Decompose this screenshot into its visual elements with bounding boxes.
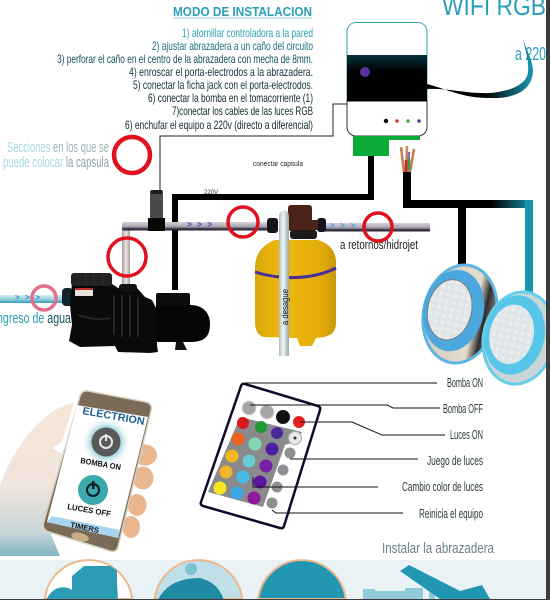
- installation steps: 6) conectar la bomba en el tomacorriente (1): [148, 91, 313, 105]
- flow arrows: [15, 220, 355, 302]
- app labels: TIMERS: [70, 520, 100, 535]
- step circle 2: [155, 560, 242, 600]
- home key: [70, 531, 90, 543]
- red circles: [32, 137, 392, 310]
- installation steps: 5) conectar la ficha jack con el porta-electrodos.: [133, 78, 313, 92]
- hand: [0, 403, 74, 556]
- power cable to pump: [175, 156, 371, 290]
- capsule holder: [148, 190, 165, 231]
- capsule wire: [160, 104, 347, 192]
- color keys: [214, 417, 283, 504]
- sand filter tank: [255, 240, 336, 346]
- tube illustration: [363, 565, 490, 599]
- pump: [62, 273, 210, 353]
- green connector: [353, 136, 420, 156]
- remote labels: [402, 376, 483, 521]
- remote labels: Cambio color de luces: [402, 480, 483, 494]
- exposed wires: [401, 146, 414, 172]
- side keys: [266, 432, 302, 508]
- fingers: [122, 444, 157, 538]
- lights cable: [407, 172, 533, 302]
- remote callout lines: [245, 383, 445, 513]
- cable to 220: [427, 38, 533, 98]
- pipe: main line: [122, 222, 270, 230]
- drain pipe: [279, 210, 290, 356]
- flow arrows: > > >: [15, 293, 40, 302]
- phone body: [43, 391, 151, 552]
- drain pipe: a desague: [280, 289, 290, 325]
- sections label: puede colocar la capsula: [3, 154, 109, 171]
- installation steps: 3) perforar el caño en el centro de la abrazadera con mecha de 8mm.: [57, 52, 313, 66]
- app labels: BOMBA ON: [80, 456, 122, 472]
- app labels: [67, 405, 146, 535]
- remote labels: Bomba ON: [447, 376, 483, 390]
- installation steps: 1) atornillar controladora a la pared: [182, 26, 313, 40]
- remote labels: Luces ON: [450, 428, 483, 442]
- controller: [347, 22, 427, 136]
- hand and phone: [0, 391, 157, 556]
- flow arrows: > > >: [330, 221, 355, 230]
- installation steps: 6) enchufar el equipo a 220v (directo a diferencial): [125, 118, 313, 132]
- remote control: [201, 384, 320, 528]
- app labels: ELECTRION: [81, 405, 146, 428]
- sections label: [3, 139, 109, 171]
- pipe: return line: [325, 223, 430, 232]
- multiport valve: [267, 205, 326, 239]
- installation steps: 4) enroscar el porta-electrodos a la abrazadera.: [129, 65, 313, 79]
- label: instalar la abrazadera: Instalar la abrazadera: [382, 540, 495, 557]
- bottom band: [0, 560, 546, 600]
- power button bomba: [92, 428, 120, 456]
- remote labels: Juego de luces: [427, 454, 483, 468]
- title: MODO DE INSTALACION: [173, 5, 312, 19]
- pipe: intake: [0, 295, 62, 303]
- color keypad: [208, 417, 302, 507]
- label: conectar capsula: conectar capsula: [253, 161, 303, 168]
- power button glow: [81, 417, 131, 467]
- step circle 1: [45, 560, 132, 600]
- phone screen: [47, 405, 148, 538]
- power button luces: [78, 475, 108, 505]
- top keys: [242, 401, 305, 428]
- sections label: Secciones en los que se: [7, 139, 109, 156]
- label: a retornos/hidrojet: a retornos/hidrojet: [340, 237, 418, 252]
- installation steps: 2) ajustar abrazadera a un caño del circuito: [152, 39, 313, 53]
- installation steps: 7)conectar los cables de las luces RGB: [172, 104, 313, 118]
- remote labels: Bomba OFF: [443, 402, 483, 416]
- flow arrows: > > >: [187, 220, 212, 229]
- label: 220v: 220V: [204, 190, 218, 196]
- pool light 2: [473, 283, 550, 393]
- step circle 3: [258, 560, 346, 599]
- remote labels: Reinicia el equipo: [419, 507, 483, 521]
- app labels: LUCES OFF: [67, 502, 112, 519]
- pool light 1: [412, 256, 508, 372]
- installation steps: [57, 26, 313, 132]
- timers bar: [47, 516, 120, 538]
- pipe: vertical riser: [122, 228, 130, 286]
